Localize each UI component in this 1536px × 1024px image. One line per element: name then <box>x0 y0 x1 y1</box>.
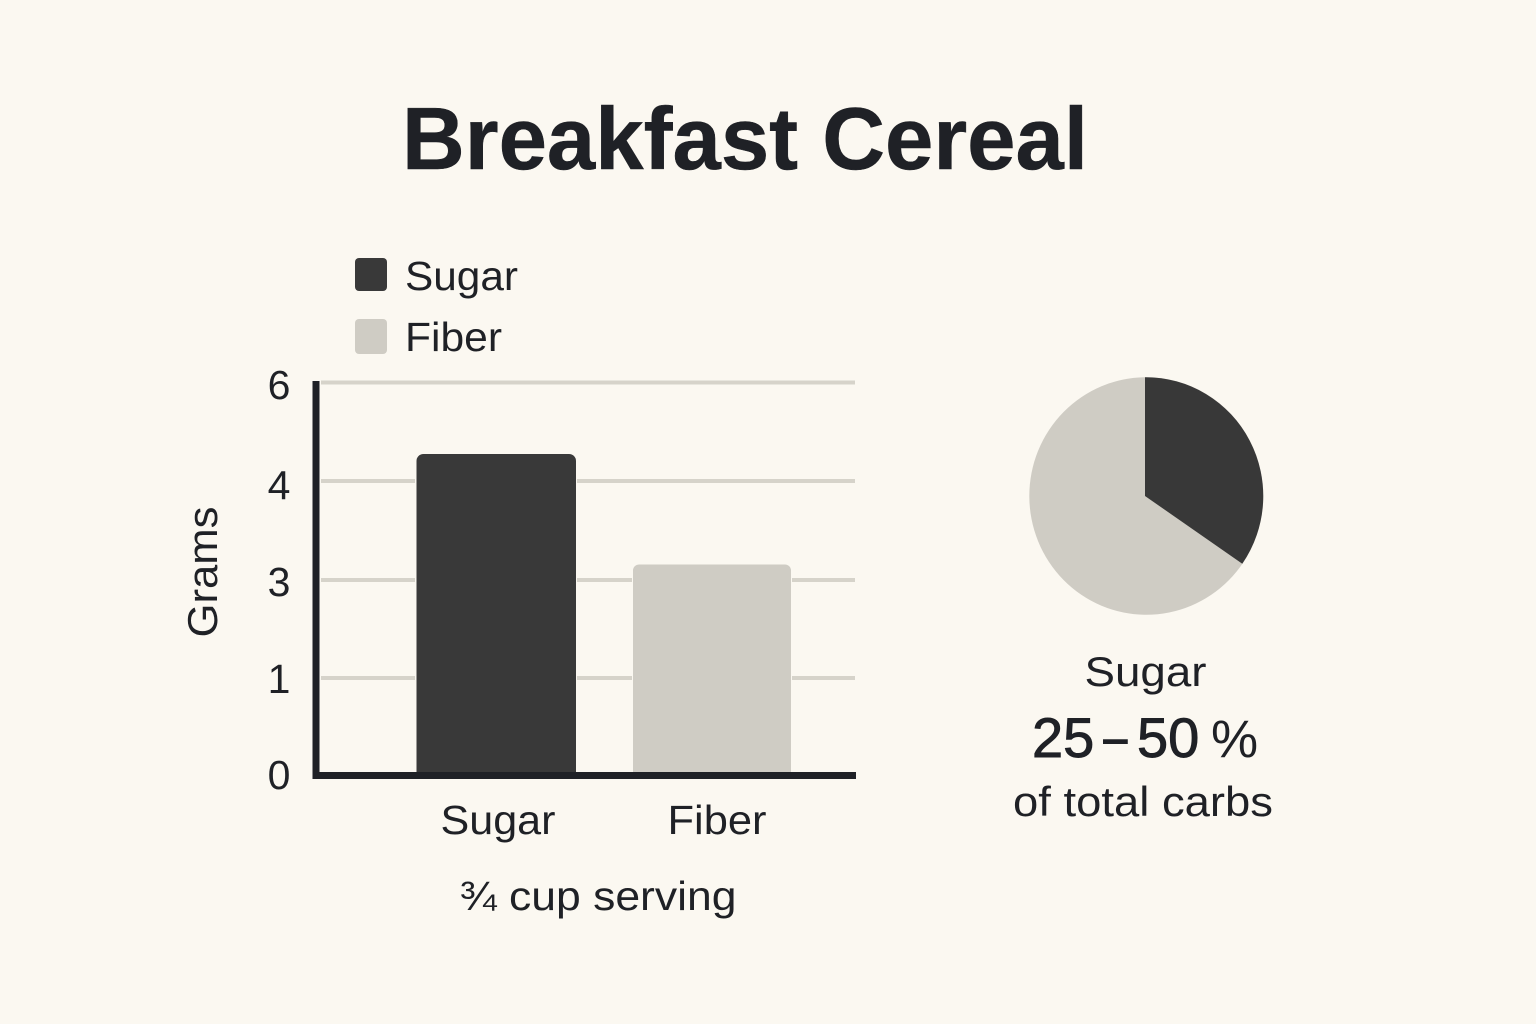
bar chart: Fiber <box>668 797 766 843</box>
bar chart <box>179 362 856 919</box>
y axis labels <box>268 362 290 798</box>
pie chart <box>1029 377 1263 615</box>
pie caption: – <box>1104 715 1127 761</box>
legend item: sugar <box>355 253 518 299</box>
pie caption: % <box>1211 710 1258 769</box>
pie caption: of total carbs <box>1013 778 1273 825</box>
axes <box>316 381 856 776</box>
legend item: fiber <box>355 314 502 360</box>
bar: fiber <box>633 564 791 772</box>
y axis labels: 6 <box>268 362 290 408</box>
bar: sugar <box>416 454 576 774</box>
y axis labels: 4 <box>268 462 290 508</box>
pie caption: 25 <box>1032 706 1094 769</box>
legend item: fiber: Fiber <box>405 314 502 360</box>
legend item: sugar: Sugar <box>405 253 518 299</box>
pie caption: Sugar <box>1084 648 1207 695</box>
y axis labels: 3 <box>268 559 290 605</box>
title: Breakfast Cereal <box>402 89 1088 188</box>
y axis labels: 0 <box>268 752 290 798</box>
pie caption <box>1013 648 1273 825</box>
pie caption: 50 <box>1137 706 1199 769</box>
y axis labels: 1 <box>268 656 290 702</box>
y axis title: Grams <box>179 506 226 638</box>
x axis labels: Sugar <box>440 797 556 843</box>
legend <box>355 253 518 360</box>
x axis caption: ¾ cup serving <box>460 873 736 919</box>
